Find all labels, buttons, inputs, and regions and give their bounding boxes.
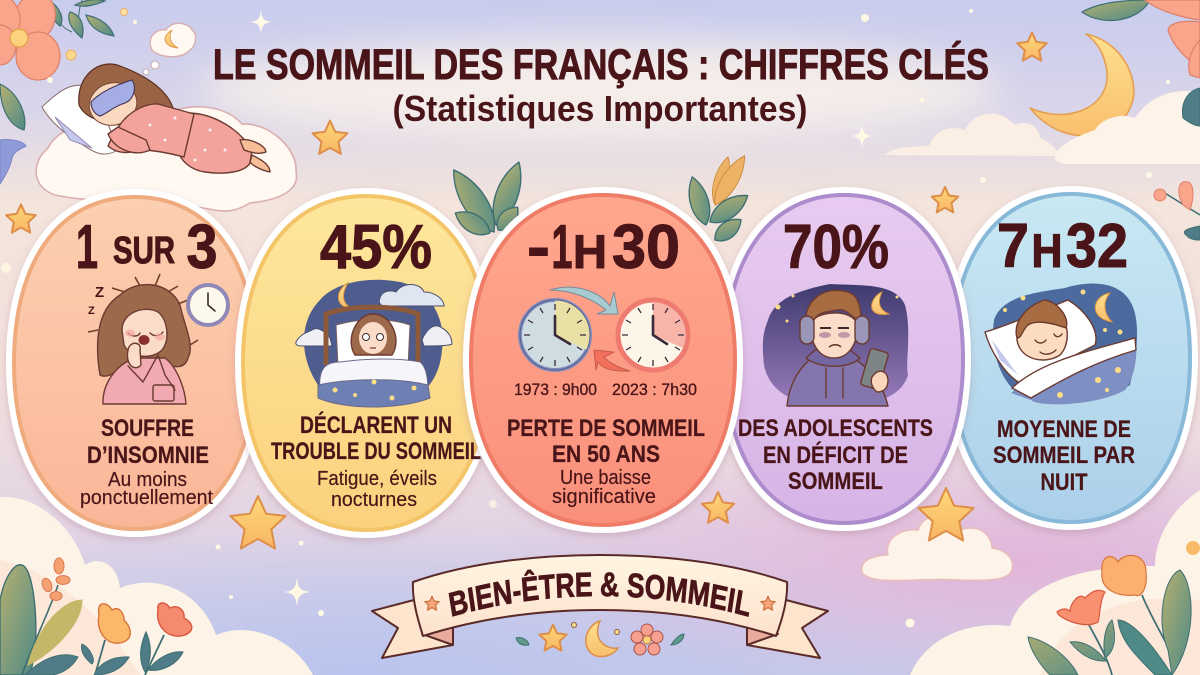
label: souffre d'insomnie [87, 415, 209, 469]
icon: yawning woman with clock [88, 274, 228, 404]
years: 1973 and 2023 [514, 380, 697, 399]
ribbon text: BIEN-ÊTRE & SOMMEIL [448, 569, 750, 617]
arm [108, 127, 150, 153]
ribbon band [413, 555, 787, 636]
clock 1973 [520, 300, 590, 370]
zzz [88, 284, 104, 317]
oval: coral [463, 187, 743, 533]
top-right moon, clouds and flower [861, 0, 1200, 164]
stat: 1 sur 3: 1 [76, 213, 98, 282]
note: au moins ponctuellement: Au moins [108, 469, 187, 491]
icon: tired teenager with phone [763, 284, 908, 406]
note: au moins ponctuellement [80, 469, 213, 509]
panel: 70% [717, 187, 971, 531]
ribbon banner [371, 554, 829, 659]
crescent moon [1030, 34, 1134, 136]
panel: -1h30 [463, 187, 743, 533]
label: moyenne de sommeil par nuit: NUIT [1040, 469, 1088, 496]
ribbon tails [372, 555, 828, 658]
label: perte de sommeil en 50 ans: EN 50 ANS [552, 441, 660, 468]
dream bubble [150, 23, 196, 57]
clock 2023 [618, 300, 688, 370]
oval: purple [717, 187, 971, 531]
cloud right [1055, 91, 1200, 164]
label: des adolescents en déficit de sommeil: SOMMEIL [788, 468, 883, 495]
panel: 7h32 [944, 186, 1198, 530]
note: fatigue, éveils nocturnes: Fatigue, éveils [317, 468, 437, 490]
panel: 45% [235, 188, 497, 538]
central leaves [444, 152, 753, 246]
label: déclarent un trouble du sommeil: DÉCLARENT UN [300, 411, 452, 439]
label: moyenne de sommeil par nuit: MOYENNE DE [997, 416, 1131, 443]
stat: 1 sur 3: SUR [113, 230, 175, 272]
stars over the cards [230, 488, 974, 548]
note: au moins ponctuellement: ponctuellement [80, 487, 213, 509]
stat: 7h32: H [1032, 224, 1062, 277]
pillow [42, 85, 118, 154]
label: des adolescents en déficit de sommeil [738, 415, 933, 495]
feet [240, 140, 270, 172]
tulips [95, 635, 164, 675]
hair [79, 64, 173, 125]
label: des adolescents en déficit de sommeil: EN DÉFICIT DE [763, 441, 908, 469]
top-left flower and leaves [0, 0, 137, 184]
years: 1973 and 2023: 1973 : 9h00 [514, 380, 597, 399]
stat: -1h30: - [527, 213, 550, 282]
years: 1973 and 2023: 2023 : 7h30 [612, 380, 697, 399]
oval: blue [944, 186, 1198, 530]
stat: 70%: 70% [783, 213, 889, 282]
arrow: to 1973 [594, 350, 630, 371]
bottom-left cloud with plants [0, 497, 313, 675]
stat: -1h30: 30 [612, 213, 680, 282]
sleep mask [91, 80, 134, 116]
clock [188, 285, 228, 325]
pyjama legs [178, 113, 252, 173]
note: une baisse significative: Une baisse [560, 467, 651, 489]
sleeping woman on cloud [36, 23, 297, 211]
stat: 7h32: 32 [1066, 212, 1128, 281]
oval: yellow [235, 188, 497, 538]
panel: 1 sur 3 [6, 189, 264, 537]
label: moyenne de sommeil par nuit: SOMMEIL PAR [993, 442, 1135, 469]
stat: -1h30 [527, 213, 680, 282]
right side branch [1154, 182, 1200, 240]
subtitle: (Statistiques Importantes) [392, 88, 808, 129]
label: perte de sommeil en 50 ans: PERTE DE SOMMEIL [507, 415, 705, 442]
ribbon ornaments [516, 621, 684, 657]
leaf [1082, 0, 1150, 21]
arrow: to 2023 [550, 287, 618, 314]
zzz: Z [95, 284, 104, 301]
icon: awake woman in bed [296, 280, 452, 407]
pyjama top [108, 104, 194, 157]
stat: 1 sur 3 [76, 213, 218, 282]
label: déclarent un trouble du sommeil [271, 411, 481, 465]
icon: sleeping boy [985, 283, 1137, 404]
stat: -1h30: 1 [552, 213, 572, 282]
note: une baisse significative: significative [552, 486, 656, 508]
title: LE SOMMEIL DES FRANÇAIS : CHIFFRES CLÉS [213, 41, 989, 89]
label: souffre d'insomnie: SOUFFRE [101, 415, 194, 442]
stat: 7h32: 7 [997, 212, 1029, 281]
face [84, 77, 142, 131]
stat: 45%: 45% [320, 213, 432, 282]
zzz: Z [88, 305, 95, 317]
label: moyenne de sommeil par nuit [993, 416, 1135, 496]
label: perte de sommeil en 50 ans [507, 415, 705, 468]
note: fatigue, éveils nocturnes: nocturnes [331, 489, 417, 511]
note: une baisse significative [552, 467, 656, 508]
label: des adolescents en déficit de sommeil: DES ADOLESCENTS [738, 415, 933, 442]
icon: two clocks with arrows [520, 287, 688, 371]
bottom-right cloud with plants [910, 490, 1200, 675]
note: fatigue, éveils nocturnes [317, 468, 437, 511]
label: souffre d'insomnie: D’INSOMNIE [87, 442, 209, 469]
stat: 7h32 [997, 212, 1128, 281]
small cloud under the star [862, 516, 1013, 581]
flower [1145, 0, 1200, 78]
oval: peach [6, 189, 264, 537]
cloud under the woman [36, 107, 297, 211]
cloud left [885, 114, 1060, 156]
stat: -1h30: H [573, 225, 607, 278]
stat: 1 sur 3: 3 [186, 213, 218, 282]
label: déclarent un trouble du sommeil: TROUBLE DU SOMMEIL [271, 438, 481, 465]
